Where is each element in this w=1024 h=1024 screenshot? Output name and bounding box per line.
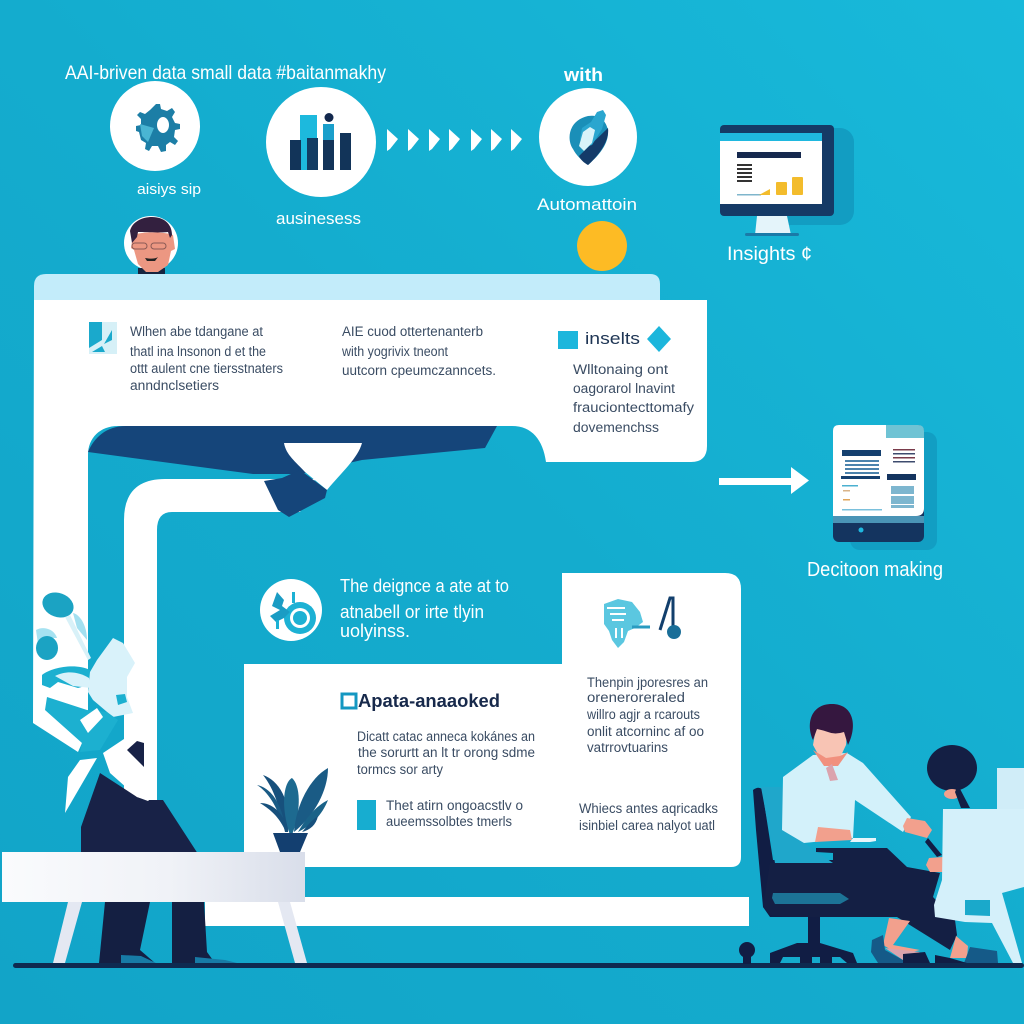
text: lower right block: vatrrovtuarins <box>587 740 668 755</box>
text: teal bar note <box>386 798 523 829</box>
shape: funnel <box>264 443 362 517</box>
text: column three <box>573 362 694 435</box>
text: lower left block: Dicatt catac anneca kokánes an <box>357 729 535 744</box>
text: lower right note <box>579 801 718 833</box>
text: lower left block <box>357 729 535 777</box>
icon: bar chart <box>266 87 376 197</box>
label: insights: Insights ¢ <box>727 244 812 265</box>
text: gauge caption: The deignce a ate at to <box>340 576 509 596</box>
text: column three: frauciontecttomafy <box>573 400 694 415</box>
hands and legs <box>763 818 998 963</box>
text: gauge caption: atnabell or irte tlyin <box>340 602 484 622</box>
right monitor <box>934 768 1024 963</box>
chair <box>739 787 857 964</box>
person: standing man <box>65 737 237 963</box>
text: column two: uutcorn cpeumczanncets. <box>342 363 496 378</box>
text: column two: AIE cuod ottertenanterb <box>342 324 483 339</box>
head <box>810 704 853 781</box>
person: seated man at desk <box>739 704 1024 964</box>
text: lower left block: tormcs sor arty <box>357 762 443 777</box>
label: analysis: aisiys sip <box>137 181 201 198</box>
text: teal bar note: Thet atirn ongoacstlv o <box>386 798 523 813</box>
text: lower left block: the sorurtt an lt tr orong sdme <box>358 745 535 760</box>
icon: data key <box>604 598 681 648</box>
icon: yellow dot <box>577 221 627 271</box>
text: teal bar note: aueemssolbtes tmerls <box>386 814 512 829</box>
icon: teal bar <box>357 800 376 830</box>
icon: tablet decision making <box>833 425 937 550</box>
text: column two: with yogrivix tneont <box>341 344 448 359</box>
banner: navy fold <box>88 426 497 474</box>
text: lower right block: Thenpin jporesres an <box>587 675 708 690</box>
heading: insights: inselts <box>585 329 640 348</box>
second head <box>927 745 977 808</box>
title: AAI-briven data small data #baitanmakhy <box>65 62 386 84</box>
text: lower right block <box>586 675 708 755</box>
text: column one <box>130 324 283 393</box>
icon: automation <box>539 88 637 186</box>
ground line <box>13 963 1024 968</box>
heading: insights <box>558 326 671 352</box>
text: lower right note: Whiecs antes aqricadks <box>579 801 718 816</box>
text: lower right note: isinbiel carea nalyot uatl <box>579 818 715 833</box>
text: column two <box>341 324 496 378</box>
panel: upper white card <box>33 274 707 752</box>
text: column one: thatl ina lnsonon d et the <box>130 344 266 359</box>
text: gauge caption <box>340 576 509 641</box>
icon: card square <box>89 322 117 354</box>
text: column one: ottt aulent cne tiersstnaters <box>130 361 283 376</box>
label: decision making: Decitoon making <box>807 559 943 581</box>
arrow: to decision <box>719 467 809 494</box>
text: column one: anndnclsetiers <box>130 378 219 393</box>
heading: data analyzed: Apata-anaaoked <box>358 691 500 711</box>
bottom strip <box>205 897 749 926</box>
connector: white tube <box>124 479 315 800</box>
text: lower right block: onlit atcorninc af oo <box>587 724 704 739</box>
icon: gear analysis <box>110 81 200 171</box>
panel: lower white card <box>244 573 741 867</box>
shirt <box>782 753 911 843</box>
heading: with: with <box>563 65 603 85</box>
text: lower right block: willro agjr a rcarouts <box>586 707 700 722</box>
potted plant <box>257 768 328 852</box>
table <box>2 852 307 963</box>
text: column three: Wlltonaing ont <box>573 362 668 377</box>
icon: monitor insights <box>720 125 854 236</box>
text: gauge caption: uolyinss. <box>340 621 410 641</box>
label: automation: Automattoin <box>537 195 637 214</box>
text: lower right block: oreneroreraled <box>587 690 685 705</box>
label: business: ausinesess <box>276 209 361 228</box>
avatar: man with glasses <box>124 216 178 274</box>
flower plant <box>36 588 135 752</box>
text: column three: oagorarol lnavint <box>573 381 675 396</box>
text: column three: dovemenchss <box>573 420 659 435</box>
arrows: chevron row <box>387 129 522 151</box>
icon: gauge circle <box>260 579 322 641</box>
text: column one: Wlhen abe tdangane at <box>130 324 263 339</box>
